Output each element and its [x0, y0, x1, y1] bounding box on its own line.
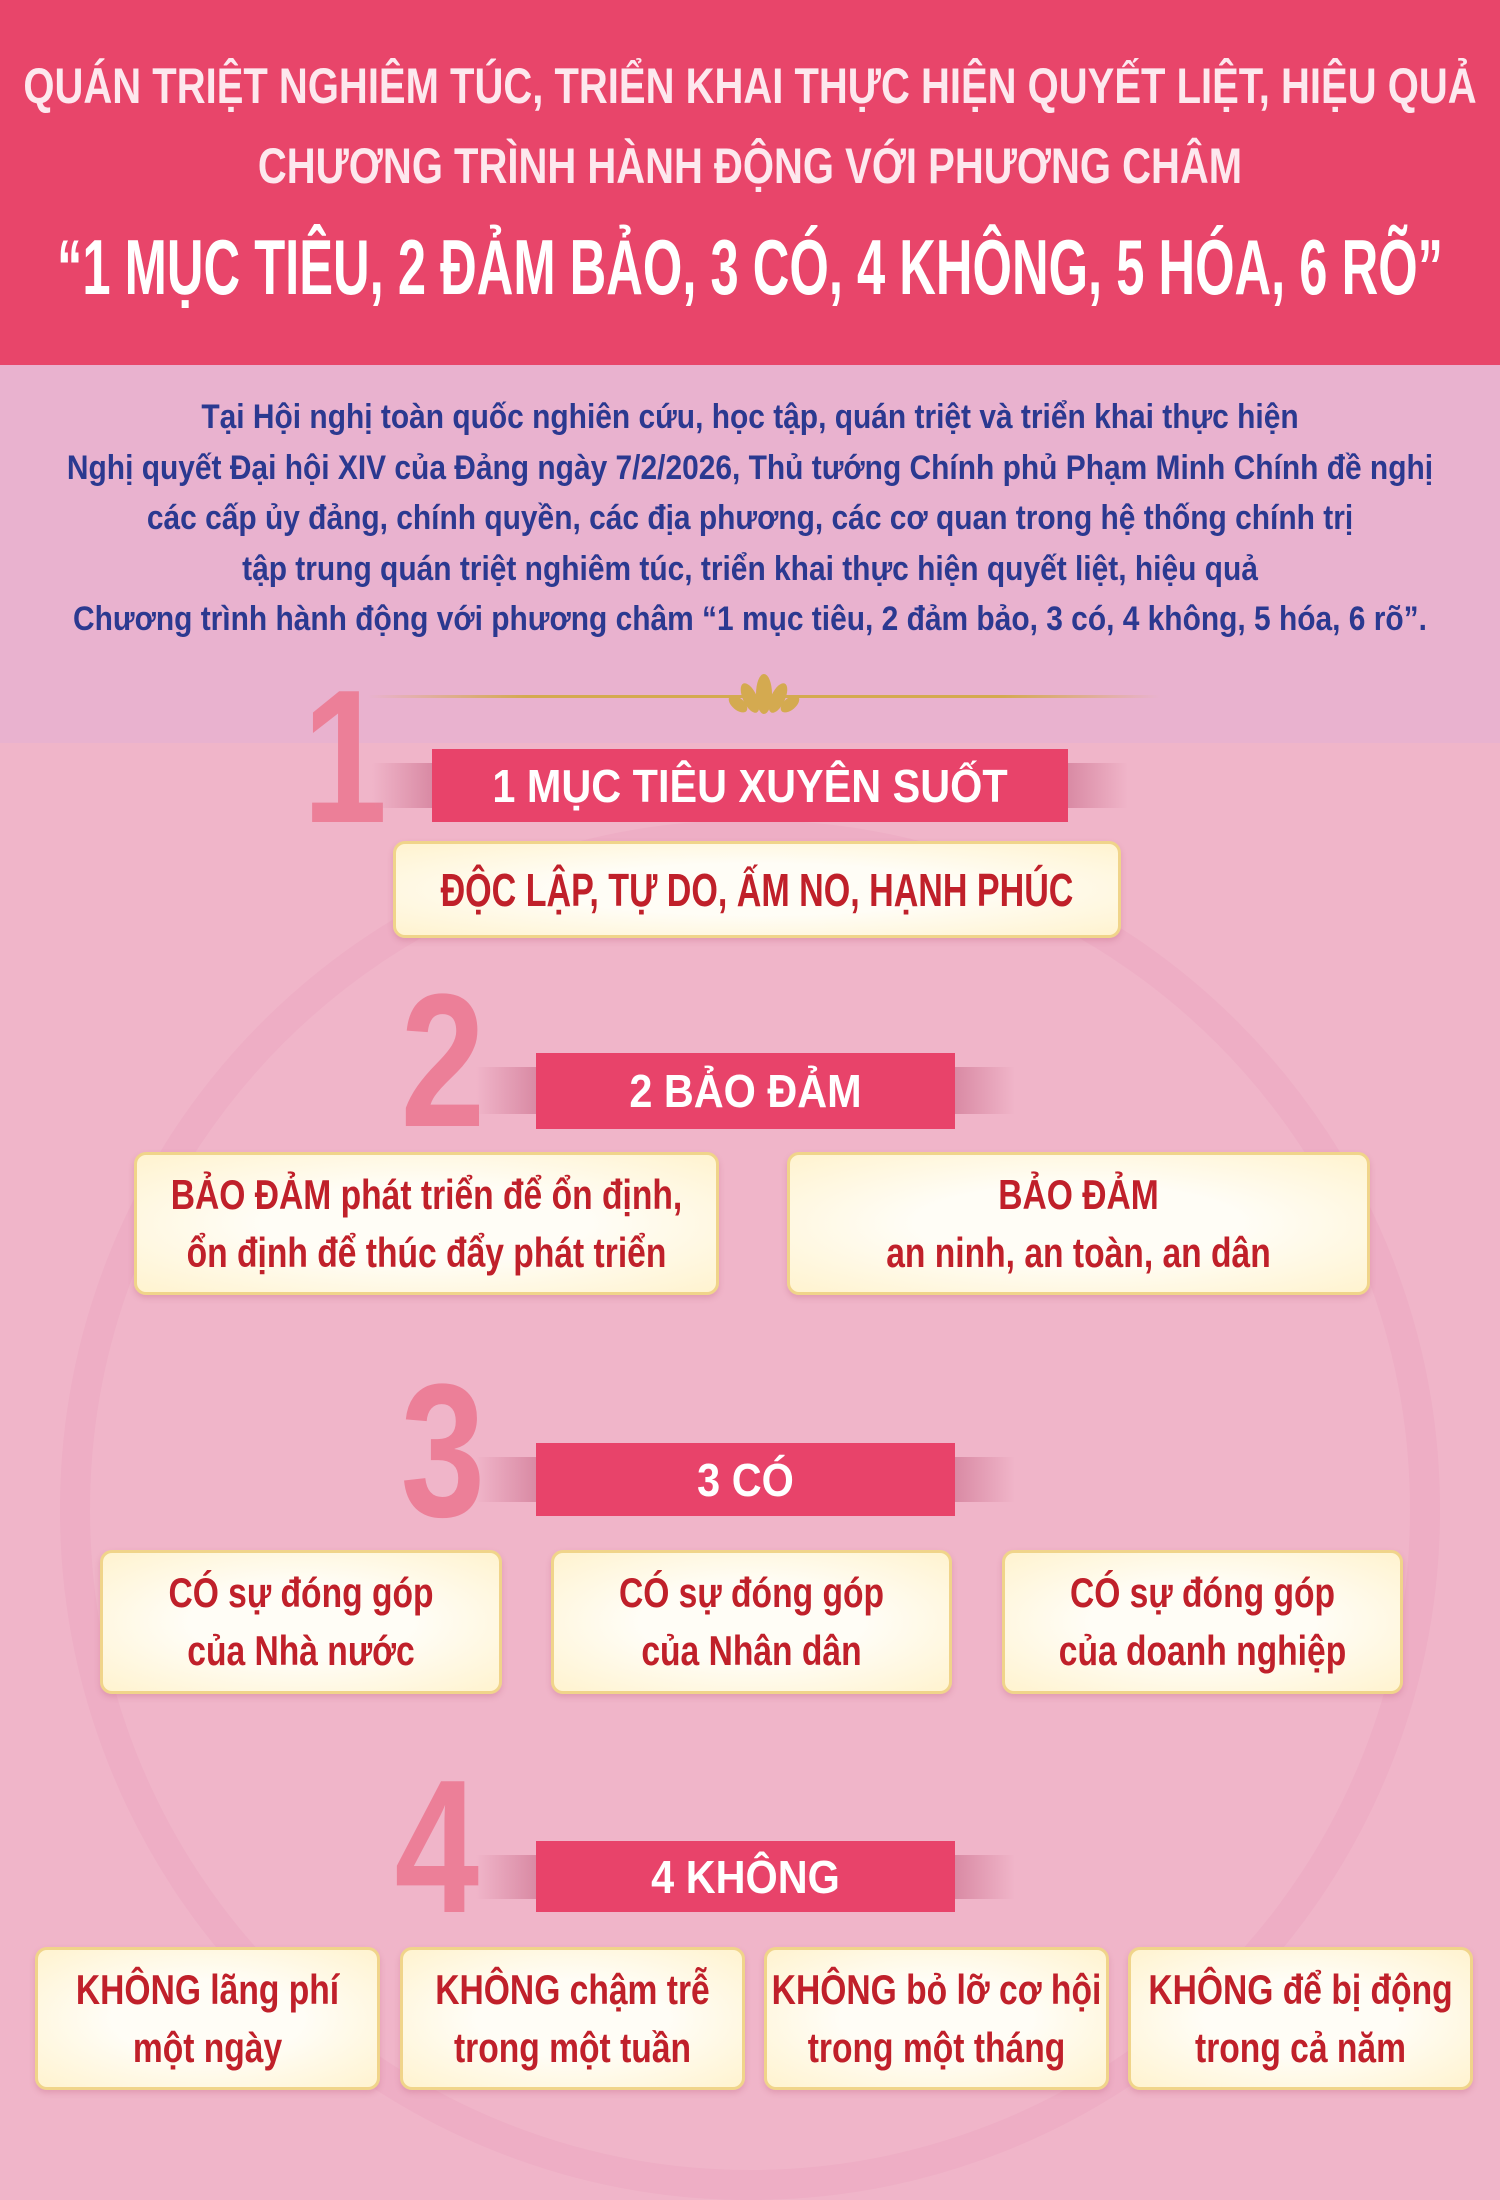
title: “1 MỤC TIÊU, 2 ĐẢM BẢO, 3 CÓ, 4 KHÔNG, 5 HÓA, 6 RÕ”: [57, 223, 1443, 311]
section 3 boxes: [98, 1550, 1404, 1698]
box: năm: [1128, 1947, 1473, 2090]
box: ngày: KHÔNG lãng phí: [76, 1966, 339, 2012]
section 2 numeral: 2: [401, 955, 485, 1167]
section 4 banner: [536, 1841, 955, 1912]
box: tháng: KHÔNG bỏ lỡ cơ hội: [772, 1966, 1101, 2012]
box: ngày: [35, 1947, 380, 2090]
section 2 boxes: [132, 1152, 1372, 1300]
title: QUÁN TRIỆT NGHIÊM TÚC, TRIỂN KHAI THỰC HIỆN QUYẾT LIỆT, HIỆU QUẢ: [23, 58, 1477, 114]
box: an ninh: [787, 1152, 1370, 1295]
section 2 banner: [536, 1053, 955, 1129]
section 2 banner: 2 BẢO ĐẢM: [629, 1065, 862, 1117]
box: ngày: một ngày: [133, 2024, 282, 2070]
section 1 numeral: 1: [303, 651, 387, 863]
box: tháng: [764, 1947, 1109, 2090]
title: [23, 58, 1477, 311]
section 1 box: ĐỘC LẬP, TỰ DO, ẤM NO, HẠNH PHÚC: [441, 864, 1073, 916]
title: CHƯƠNG TRÌNH HÀNH ĐỘNG VỚI PHƯƠNG CHÂM: [258, 138, 1242, 194]
intro text: các cấp ủy đảng, chính quyền, các địa phương, các cơ quan trong hệ thống chính trị: [147, 499, 1353, 537]
box: Nhà nước: của Nhà nước: [187, 1627, 415, 1674]
intro text: Chương trình hành động với phương châm “1 mục tiêu, 2 đảm bảo, 3 có, 4 không, 5 hóa, 6 rõ”.: [73, 600, 1427, 638]
box: phát triển: ổn định để thúc đẩy phát triển: [187, 1228, 666, 1276]
header band: [0, 0, 1500, 365]
section 4 banner: 4 KHÔNG: [651, 1850, 840, 1902]
ornament: gold line with lotus: [378, 674, 1150, 714]
box: doanh nghiệp: [1002, 1550, 1403, 1694]
box: Nhà nước: [100, 1550, 502, 1694]
box: phát triển: BẢO ĐẢM phát triển để ổn định,: [171, 1170, 682, 1218]
box: tuần: [400, 1947, 745, 2090]
section 1 banner: 1 MỤC TIÊU XUYÊN SUỐT: [492, 760, 1008, 812]
section 1 banner: [432, 749, 1068, 822]
box: năm: KHÔNG để bị động: [1148, 1966, 1453, 2012]
box: tháng: trong một tháng: [808, 2024, 1065, 2070]
upper background: [0, 365, 1500, 743]
box: doanh nghiệp: CÓ sự đóng góp: [1070, 1569, 1335, 1616]
box: an ninh: an ninh, an toàn, an dân: [886, 1228, 1271, 1276]
box: tuần: KHÔNG chậm trễ: [435, 1966, 710, 2012]
box: tuần: trong một tuần: [454, 2024, 691, 2070]
box: Nhân dân: CÓ sự đóng góp: [619, 1569, 884, 1616]
section 3 numeral: 3: [401, 1345, 485, 1557]
box: an ninh: BẢO ĐẢM: [998, 1170, 1159, 1218]
section 1 box: [393, 841, 1121, 938]
box: doanh nghiệp: của doanh nghiệp: [1059, 1627, 1346, 1674]
intro text: Tại Hội nghị toàn quốc nghiên cứu, học tập, quán triệt và triển khai thực hiện: [201, 398, 1299, 436]
box: Nhà nước: CÓ sự đóng góp: [168, 1569, 434, 1616]
section 3 banner: 3 CÓ: [697, 1454, 794, 1506]
box: Nhân dân: của Nhân dân: [641, 1627, 862, 1674]
box: năm: trong cả năm: [1195, 2024, 1406, 2070]
decorative drum circle: [60, 820, 1440, 2200]
section 3 banner: [536, 1443, 955, 1516]
intro text: [67, 398, 1433, 638]
box: Nhân dân: [551, 1550, 952, 1694]
section 4 numeral: 4: [395, 1741, 479, 1953]
intro text: tập trung quán triệt nghiêm túc, triển khai thực hiện quyết liệt, hiệu quả: [242, 550, 1258, 588]
intro text: Nghị quyết Đại hội XIV của Đảng ngày 7/2/2026, Thủ tướng Chính phủ Phạm Minh Chính đề nghị: [67, 448, 1433, 486]
section 4 boxes: [34, 1947, 1474, 2094]
box: phát triển: [134, 1152, 719, 1295]
